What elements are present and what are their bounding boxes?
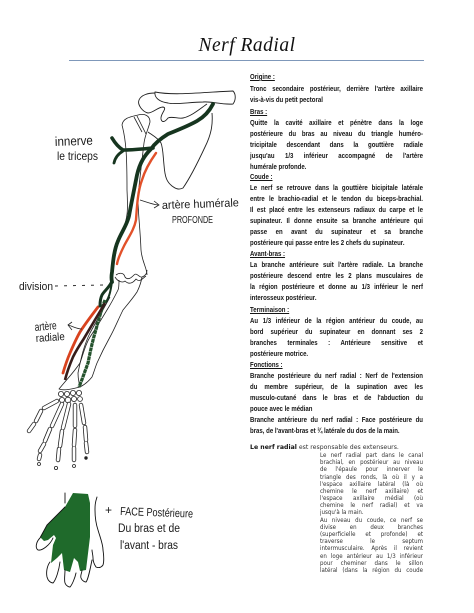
text: Fonctions: pouce avec le médian (250, 405, 312, 413)
text: Coude: supinateur. Il donne ensuite sa branche antérieure qui (250, 217, 423, 225)
label: artère radiale: radiale (35, 331, 65, 345)
text: Fonctions (250, 372, 423, 435)
arrow to deep brachial artery (140, 200, 159, 208)
text: Origine (250, 85, 423, 104)
text: Coude (250, 184, 423, 247)
text: Avant-bras: postérieure descend entre les 2 plans musculaires de (250, 272, 423, 280)
posterior nerve branch (79, 300, 105, 387)
title rule (69, 60, 424, 61)
text: Fonctions: bras, de l'avant-bras et ¾ latérale du dos de la main. (250, 427, 400, 435)
heading: Origine: Origine : (250, 73, 275, 81)
arrow to radial artery (68, 322, 82, 330)
text: Coude: entre le brachio-radial et le tendon du biceps-brachial. (250, 195, 423, 203)
forearm bones (59, 276, 146, 390)
text: nerve course description: pour cheminer dans le sillon (320, 560, 423, 567)
label: innerve le triceps (55, 133, 98, 163)
text: Avant-bras: La branche antérieure suit l'artère radiale. La branche (250, 261, 423, 269)
text: nerve course description: l'espace axillaire latéral (là où (320, 481, 423, 488)
humeral artery, red (117, 153, 156, 264)
text: Coude: passe en avant du supinateur et sa branche (250, 228, 423, 236)
text: nerve course description: latéral (dans la région du coude (320, 567, 423, 574)
heading: Terminaison: Terminaison : (250, 306, 289, 314)
text: Terminaison: branches terminales : Antérieure sensitive et (250, 339, 423, 347)
heading: Bras: Bras : (250, 108, 267, 116)
text: nerve course description: Le nerf radial part dans le canal (320, 452, 423, 459)
text: Bras: postérieure du bras au niveau du triangle huméro- (250, 130, 423, 138)
text: nerve course description: traverse le septum (320, 538, 423, 545)
text: nerve course description: jusqu'à la main. (320, 509, 364, 516)
text: nerve course description: intermusculaire. Après il revient (320, 545, 423, 552)
text: Coude: Il est placé entre les extenseurs radiaux du carpe et le (250, 206, 423, 214)
radial nerve, dark green (100, 104, 213, 306)
label: face postérieure du bras et de l'avant-bras (105, 503, 193, 552)
label: artère radiale (34, 320, 65, 345)
humerus (114, 114, 150, 279)
label: artère humérale profonde: artère humérale (162, 197, 239, 212)
text: nerve course description: Au niveau du coude, ce nerf se (320, 517, 423, 524)
text: nerve course description: chemine le nerf axillaire) et (320, 488, 423, 495)
text: nerve course description: en loge antérieur au 1/3 inférieur (320, 553, 423, 560)
division dashed line (55, 285, 103, 286)
text: Bras (250, 119, 423, 171)
text: Coude: postérieure qui passe entre les 2 chefs du supinateur. (250, 239, 405, 247)
text: Avant-bras: interosseux postérieur. (250, 294, 317, 302)
text: Fonctions: Branche postérieure du nerf radial : Nerf de l'extension (250, 372, 423, 380)
text: Terminaison: Au 1/3 inférieur de la région antérieur du coude, au (250, 317, 423, 325)
text: Origine: Tronc secondaire postérieur, derrière l'artère axillaire (250, 85, 423, 93)
scapula and clavicle (139, 91, 235, 189)
text: Bras: tricipitale descendant dans la gouttière radiale (250, 141, 423, 149)
label: face postérieure du bras et de l'avant-bras: l'avant - bras (120, 540, 178, 552)
text: responsable des extenseurs: Le nerf radial est responsable des extenseurs. (250, 444, 399, 451)
label: artère humérale profonde: PROFONDE (172, 215, 213, 226)
text: Bras: jusqu'au 1/3 inférieur accompagné de l'artère (250, 152, 423, 160)
heading: Coude: Coude : (250, 173, 272, 181)
text: nerve course description: chemine le nerf radial) et va (320, 502, 423, 509)
title: Nerf Radial (198, 35, 296, 56)
anterior nerve branch (65, 303, 105, 380)
heading: Fonctions: Fonctions : (250, 361, 283, 369)
carpal and hand skeleton (29, 390, 87, 470)
heading: Avant-bras: Avant-bras : (250, 250, 285, 258)
radial artery, red (63, 307, 98, 373)
text: Fonctions: du membre supérieur, de la supination avec les (250, 383, 423, 391)
label: face postérieure du bras et de l'avant-bras: FACE Postérieure (120, 506, 193, 521)
text: nerve course description: l'espace axillaire médial (où (320, 495, 423, 502)
text: Terminaison: postérieure motrice. (250, 350, 308, 358)
label: division: division (19, 281, 53, 293)
text: Fonctions: Branche antérieure du nerf radial : Face postérieure du (250, 416, 423, 424)
text: nerve course description: triangle des ronds, là où il y a (320, 474, 423, 481)
text: nerve course description: de l'épaule pour innerver le (320, 466, 423, 473)
text: Coude: Le nerf se retrouve dans la gouttière bicipitale latérale (250, 184, 423, 192)
text: Terminaison: bord supérieur du supinateur en donnant ses 2 (250, 328, 423, 336)
label: innerve le triceps: innerve (55, 133, 93, 149)
label: artère radiale: artère (34, 320, 57, 334)
icon: green hand, posterior view (36, 493, 104, 587)
label: face postérieure du bras et de l'avant-bras: + (105, 503, 112, 517)
text: nerve course description: (superficielle et profonde) et (320, 531, 423, 538)
text column: anatomical description (250, 73, 423, 435)
text: nerve course description: brachial, en postérieur au niveau (320, 459, 423, 466)
text: Origine: vis-à-vis du petit pectoral (250, 96, 323, 104)
label: face postérieure du bras et de l'avant-bras: Du bras et de (118, 523, 180, 535)
text: Terminaison (250, 317, 423, 358)
text: Bras: Quitte la cavité axillaire et pénètre dans la loge (250, 119, 423, 127)
text: nerve course description (320, 452, 423, 574)
text: Bras: humérale profonde. (250, 163, 306, 171)
text: Avant-bras (250, 261, 423, 302)
text: Avant-bras: la région postérieure et donne au 1/3 inférieur le nerf (250, 283, 423, 291)
label: innerve le triceps: le triceps (57, 149, 98, 163)
text: nerve course description: divise en deux branches (320, 524, 423, 531)
label: artère humérale profonde (162, 197, 239, 226)
text: Fonctions: musculo-cutané dans le bras et de l'abduction du (250, 394, 423, 402)
